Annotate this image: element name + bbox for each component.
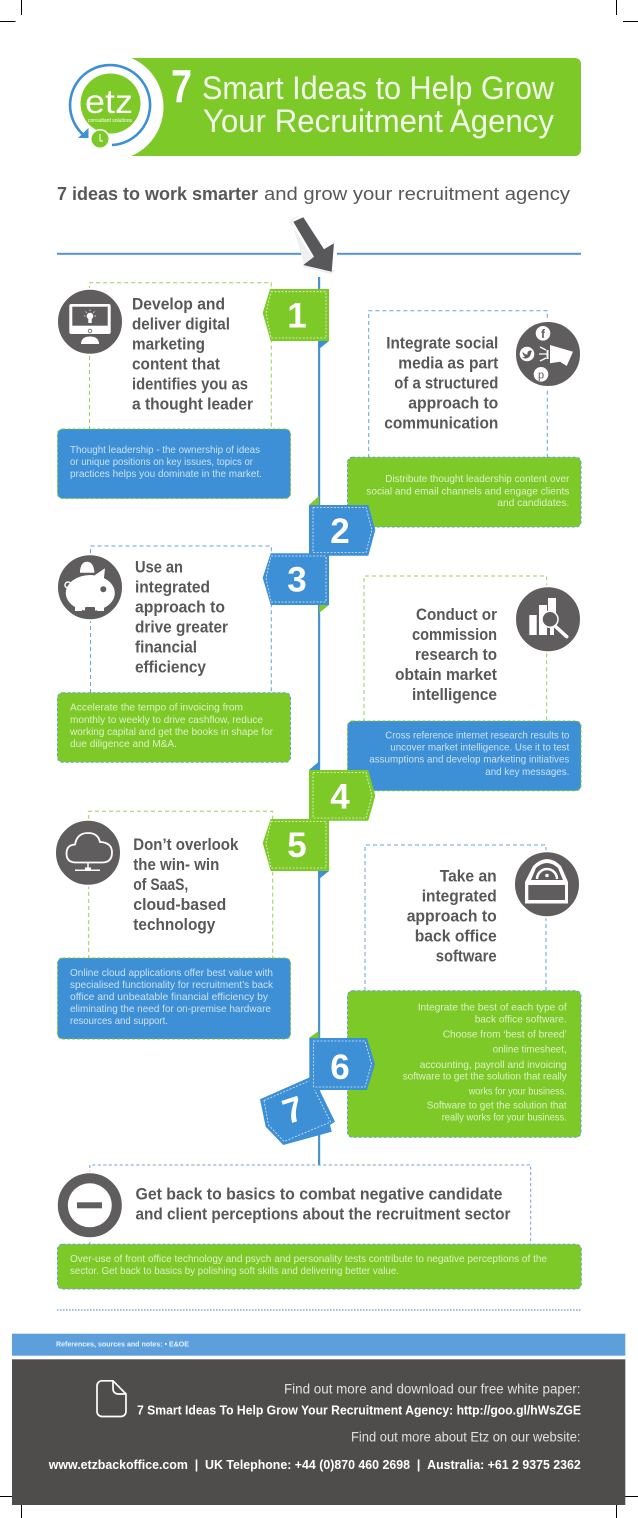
subtitle: 7 ideas to work smarter [57, 183, 258, 204]
title line 1: Smart Ideas to Help Grow [202, 70, 555, 106]
heading [135, 559, 229, 677]
callout: Cross reference internet research results to [385, 730, 569, 742]
logo disc [56, 54, 164, 160]
callout: online timesheet, [493, 1044, 567, 1056]
icon: cloud [55, 820, 121, 886]
heading: content that [132, 355, 220, 373]
heading: back office [415, 928, 497, 946]
banner background [120, 58, 581, 156]
panel 7: back to basics [57, 1165, 581, 1289]
callout: assumptions and develop marketing initiatives [369, 754, 569, 766]
footer line 1: Find out more and download our free white paper: [284, 1381, 580, 1396]
callout: Distribute thought leadership content over [385, 473, 570, 485]
heading [407, 868, 497, 966]
heading: technology [133, 916, 216, 934]
callout: uncover market intelligence. Use it to test [390, 742, 569, 754]
logo: etz [70, 65, 150, 149]
heading: of SaaS, [133, 876, 188, 894]
heading: marketing [132, 335, 205, 353]
heading [136, 1185, 511, 1223]
heading: commission [412, 626, 497, 644]
arrow [290, 215, 336, 274]
title line 2: Your Recruitment Agency [203, 103, 554, 139]
callout: office and unbeatable financial efficiency by [70, 991, 269, 1003]
callout: works for your business. [468, 1086, 567, 1098]
badge 5: 5 [287, 826, 307, 865]
heading: Get back to basics to combat negative candidate [136, 1185, 502, 1203]
heading [384, 334, 499, 432]
callout: working capital and get the books in shape for [69, 726, 273, 738]
subtitle: and grow your recruitment agency [264, 183, 571, 204]
callout [348, 991, 581, 1137]
badge 5 [263, 819, 329, 879]
subtitle [57, 183, 571, 204]
callout: and key messages. [485, 766, 569, 778]
panel 6: back office software [348, 845, 581, 1137]
heading: drive greater [135, 619, 229, 637]
heading: Don’t overlook [133, 836, 239, 854]
callout [58, 958, 290, 1039]
heading: efficiency [135, 659, 207, 677]
heading: software [436, 948, 497, 966]
heading: the win- win [133, 856, 219, 874]
panel 3: financial efficiency [57, 546, 290, 762]
callout [58, 693, 290, 762]
heading: identifies you as [132, 375, 248, 393]
callout: Accelerate the tempo of invoicing from [70, 702, 243, 714]
logo: etz: etz [85, 83, 133, 120]
heading [395, 606, 498, 704]
badge 6: 6 [330, 1048, 350, 1087]
heading: cloud-based [133, 896, 226, 914]
header banner [56, 54, 581, 160]
heading: intelligence [412, 686, 497, 704]
footer panel [12, 1359, 625, 1505]
callout [348, 721, 581, 791]
badge 2: 2 [330, 512, 350, 551]
icon: back office box [514, 851, 580, 917]
heading: communication [384, 414, 498, 432]
footer line 2: 7 Smart Ideas To Help Grow Your Recruitment Agency: http://goo.gl/hWsZGE [137, 1403, 581, 1418]
callout [348, 457, 581, 527]
heading: media as part [398, 354, 499, 372]
callout: Choose from ‘best of breed’ [443, 1028, 567, 1040]
panel 4: market research [348, 576, 581, 791]
timeline [318, 277, 320, 1165]
footer line 4: www.etzbackoffice.com | UK Telephone: +44 (0)870 460 2698 | Australia: +61 2 9375 2362 [48, 1457, 581, 1472]
callout: monthly to weekly to drive cashflow, reduce [70, 714, 263, 726]
heading: and client perceptions about the recruitment sector [136, 1205, 511, 1223]
heading: integrated [135, 579, 210, 597]
callout: specialised functionality for recruitment’s back [70, 979, 274, 991]
heading [132, 295, 254, 413]
badge 3: 3 [287, 560, 307, 600]
heading: of a structured [394, 374, 498, 392]
badge 1 [263, 289, 329, 349]
panel 1: digital marketing [57, 283, 290, 498]
horizontal rule [57, 253, 581, 255]
callout: back office software. [475, 1014, 567, 1026]
callout: eliminating the need for on-premise hardware [70, 1003, 271, 1015]
callout: due diligence and M&A. [70, 738, 177, 750]
icon: megaphone and social: f [541, 327, 546, 341]
heading: Conduct or [416, 606, 498, 624]
callout: Software to get the solution that [427, 1100, 567, 1112]
badge 7 [260, 1076, 335, 1145]
title number: 7 [171, 60, 192, 112]
callout: really works for your business. [442, 1112, 567, 1124]
heading: Use an [135, 559, 183, 577]
icon: megaphone and social: p [538, 370, 544, 382]
icon: piggy bank [57, 554, 123, 620]
badge 6 [309, 1031, 375, 1090]
heading: obtain market [395, 666, 497, 684]
heading: approach to [408, 394, 498, 412]
heading: approach to [135, 599, 225, 617]
badge 4: 4 [330, 778, 350, 816]
badge 1: 1 [287, 296, 307, 336]
heading: a thought leader [132, 395, 254, 413]
callout [58, 429, 290, 498]
badge 2 [309, 496, 375, 556]
logo: etz: consultant solutions [88, 118, 132, 124]
callout: Thought leadership - the ownership of ideas [70, 444, 260, 456]
callout: practices helps you dominate in the market. [70, 468, 262, 480]
footer line 3: Find out more about Etz on our website: [351, 1430, 580, 1445]
callout: Integrate the best of each type of [418, 1002, 567, 1014]
callout: resources and support. [70, 1015, 168, 1027]
heading: approach to [407, 908, 497, 926]
panel 2: social media [348, 311, 581, 527]
icon: monitor with light bulb [57, 289, 123, 355]
heading: research to [415, 646, 497, 664]
panel 5: SaaS [55, 811, 290, 1039]
icon: minus sign [57, 1172, 123, 1238]
heading: Develop and [132, 295, 225, 313]
badge 3 [263, 553, 329, 613]
badge 7: 7 [278, 1089, 308, 1132]
callout: or unique positions on key issues, topics or [70, 456, 253, 468]
callout: social and email channels and engage clients [366, 485, 569, 497]
heading: Integrate social [386, 334, 498, 352]
heading: integrated [422, 888, 497, 906]
callout: accounting, payroll and invoicing [420, 1059, 567, 1071]
heading: deliver digital [132, 315, 230, 333]
callout: Over-use of front office technology and psych and personality tests contribute to negative perceptions of the [70, 1253, 547, 1265]
callout: software to get the solution that really [403, 1071, 567, 1083]
references bar [12, 1334, 625, 1356]
references bar: References, sources and notes: • E&OE [56, 1340, 189, 1349]
callout: and candidates. [497, 497, 569, 509]
icon: chart with magnifier [515, 586, 581, 652]
heading: financial [135, 639, 197, 657]
icon: document [97, 1381, 126, 1417]
icon: megaphone and social [515, 321, 581, 387]
heading: Take an [440, 868, 497, 886]
heading [133, 836, 239, 934]
dotted divider [57, 1309, 581, 1311]
callout [58, 1244, 581, 1289]
badge 4 [309, 762, 375, 821]
callout: Online cloud applications offer best value with [70, 967, 273, 979]
callout: sector. Get back to basics by polishing soft skills and delivering better value. [70, 1265, 399, 1277]
